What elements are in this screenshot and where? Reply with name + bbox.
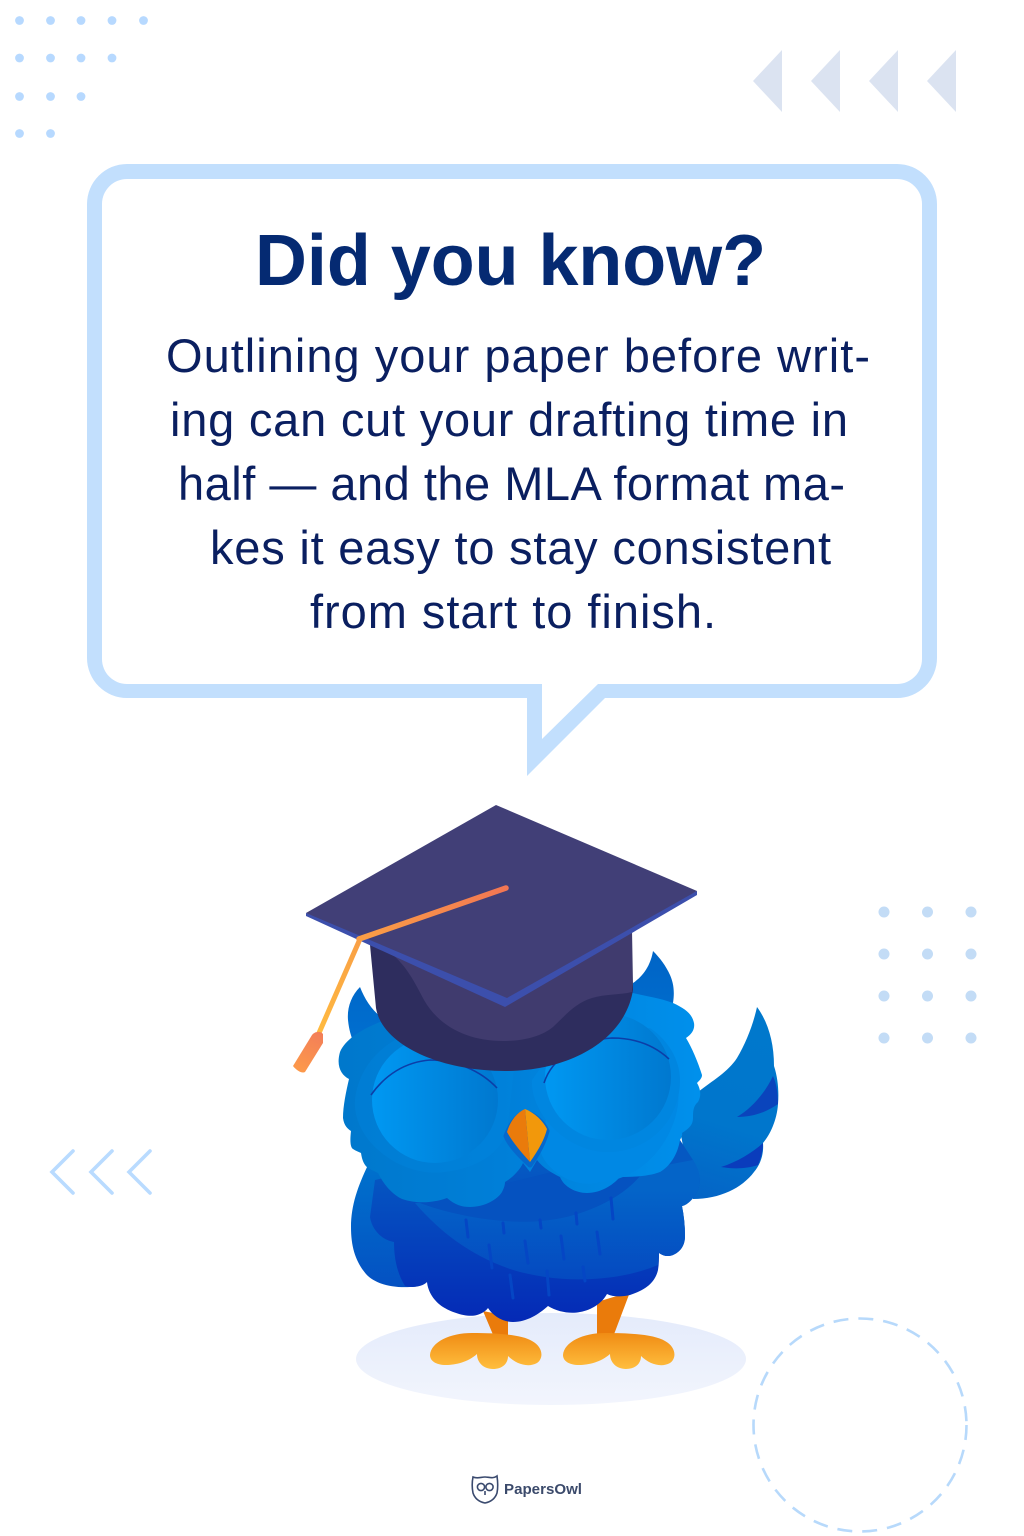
dot grid: right bbox=[878, 906, 976, 1044]
ground shadow bbox=[356, 1313, 746, 1405]
owl feather marks bbox=[466, 1198, 613, 1298]
logo: PapersOwl bbox=[472, 1476, 582, 1503]
owl head bbox=[339, 993, 702, 1207]
body text: from start to finish. bbox=[310, 585, 716, 638]
tassel bbox=[293, 1032, 323, 1073]
title: Did you know? bbox=[255, 221, 766, 301]
body text: kes it easy to stay consistent bbox=[210, 521, 831, 574]
chevron arrows: left bbox=[52, 1151, 150, 1193]
body text: Outlining your paper before writ- bbox=[166, 329, 870, 382]
owl ears bbox=[348, 951, 674, 1044]
owl with graduation cap bbox=[293, 805, 778, 1369]
owl legs bbox=[483, 1292, 630, 1337]
speech bubble bbox=[87, 164, 937, 776]
owl eyelids bbox=[371, 1038, 669, 1095]
triangle arrows: top right bbox=[753, 50, 956, 112]
graduation cap bbox=[293, 805, 697, 1073]
owl tail bbox=[680, 1007, 778, 1199]
cap underside edge bbox=[306, 891, 697, 1007]
owl feet bbox=[430, 1333, 674, 1369]
dot grid: top left bbox=[15, 16, 148, 138]
body text: ing can cut your drafting time in bbox=[170, 393, 848, 446]
owl eyes bbox=[372, 1014, 671, 1163]
owl beak bbox=[506, 1109, 547, 1165]
cap cord bbox=[359, 888, 506, 939]
body text: half — and the MLA format ma- bbox=[178, 457, 845, 510]
body text bbox=[166, 329, 870, 638]
cap body bbox=[370, 930, 633, 1071]
owl body bbox=[351, 1140, 700, 1322]
logo wordmark: PapersOwl bbox=[504, 1482, 582, 1498]
logo icon bbox=[472, 1476, 498, 1503]
owl cheek shading bbox=[355, 1025, 680, 1184]
cap top bbox=[306, 805, 697, 998]
dashed circle bbox=[754, 1318, 966, 1532]
tassel string bbox=[319, 939, 360, 1033]
